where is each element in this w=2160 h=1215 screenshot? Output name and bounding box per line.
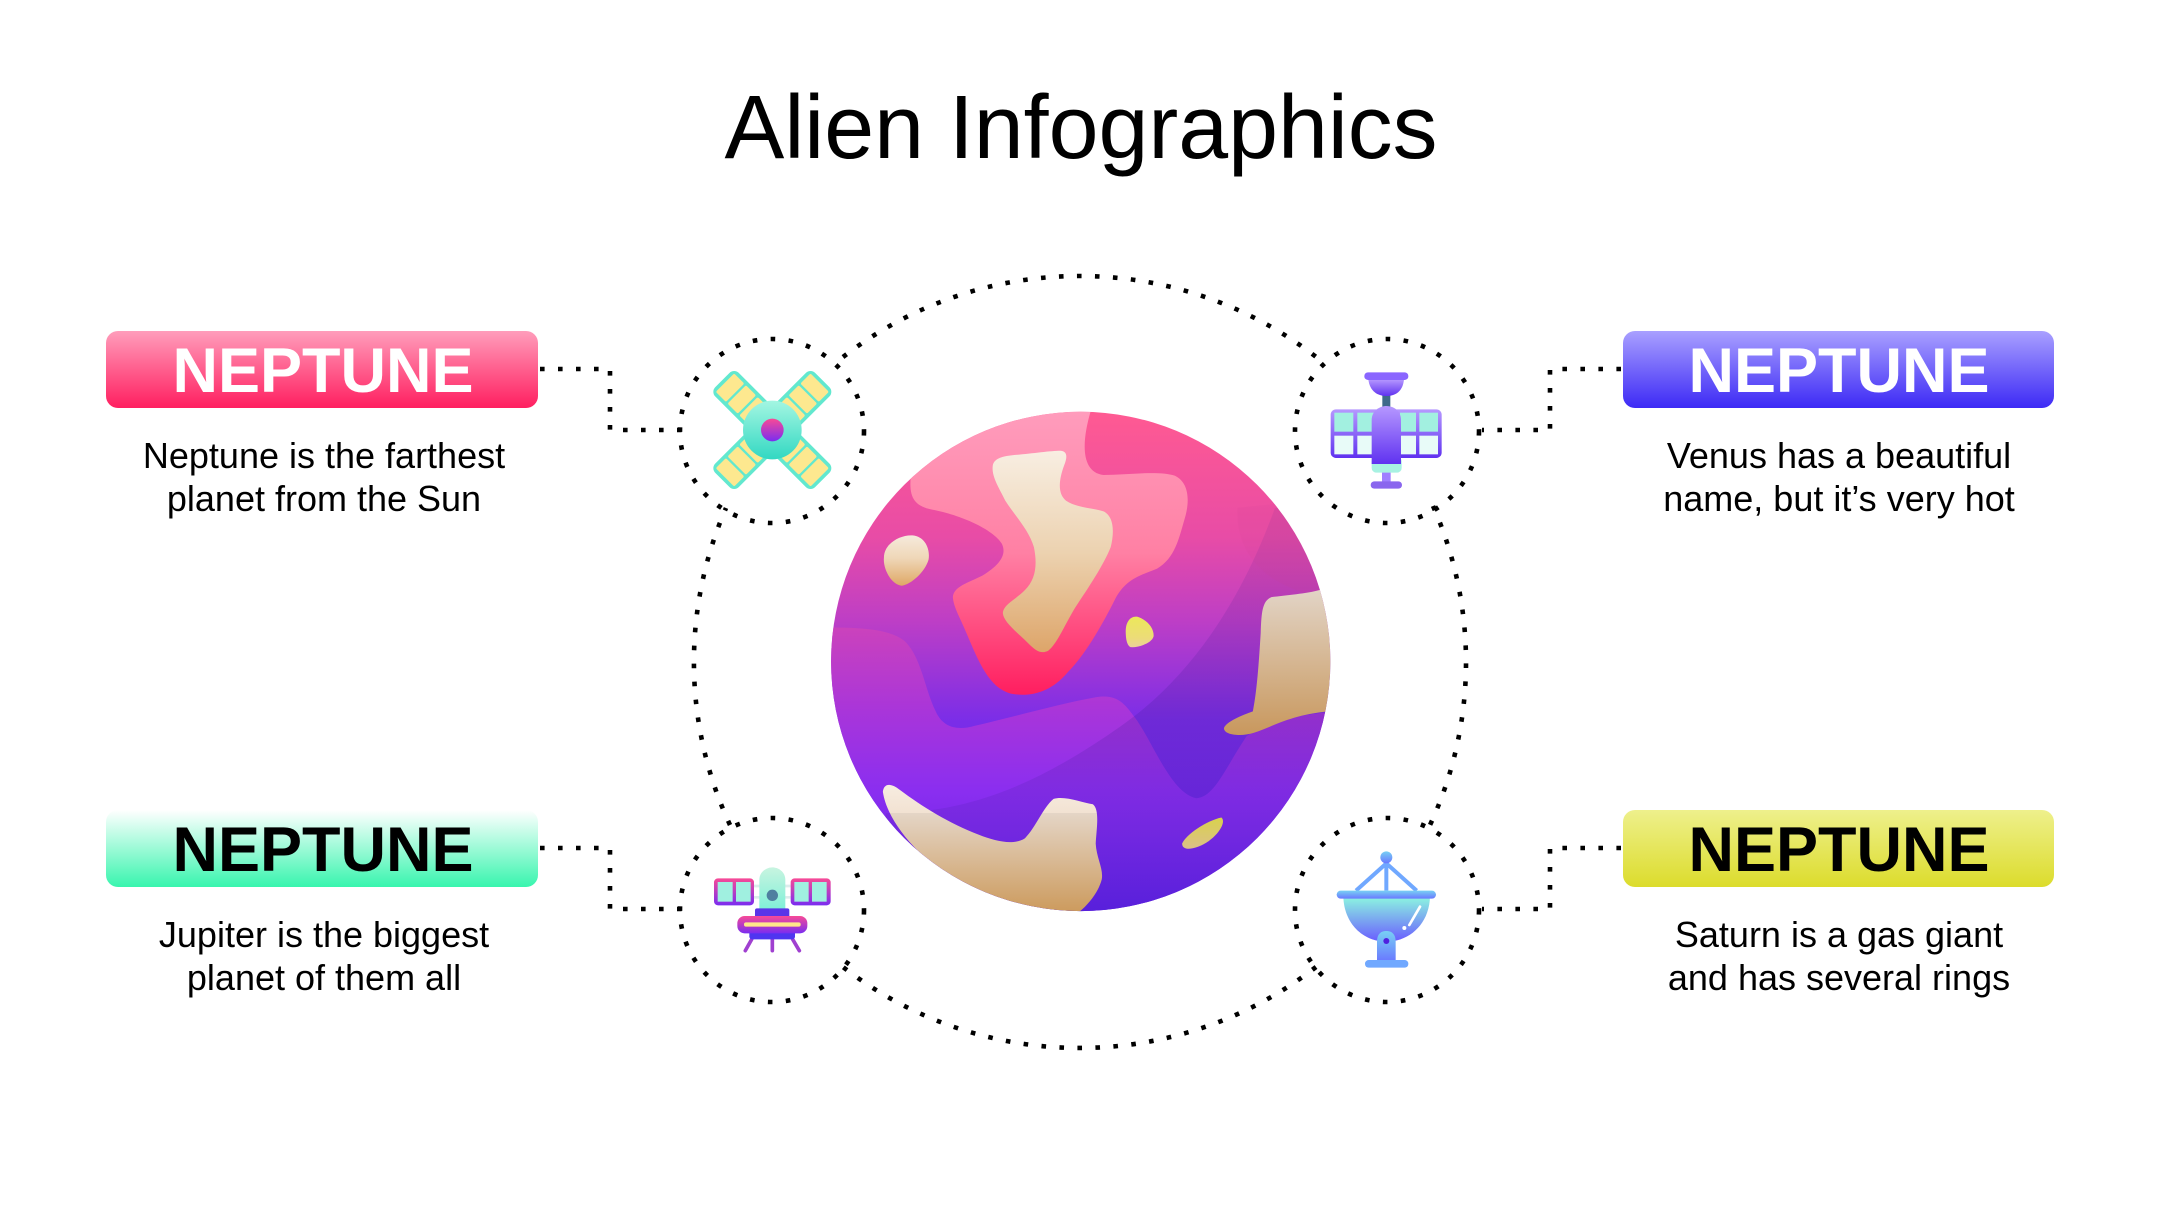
icon: purple satellite bbox=[1331, 372, 1442, 489]
panel: top-left label: planet from the Sun bbox=[167, 478, 481, 519]
panel: bottom-right label: Saturn is a gas giant bbox=[1675, 914, 2003, 955]
panel: bottom-right label: NEPTUNE bbox=[1688, 815, 1990, 885]
panel: top-left label: Neptune is the farthest bbox=[143, 435, 505, 476]
panel: bottom-left label: Jupiter is the biggest bbox=[159, 914, 489, 955]
panel: top-left label bbox=[106, 331, 538, 519]
panel: top-left label: NEPTUNE bbox=[172, 336, 474, 406]
title: Alien Infographics bbox=[725, 78, 1437, 178]
connector and orbit dotted lines bbox=[540, 276, 1621, 1048]
icon: lander satellite bbox=[714, 867, 831, 951]
panel: bottom-left label: planet of them all bbox=[187, 957, 461, 998]
panel: top-right label: Venus has a beautiful bbox=[1667, 435, 2011, 476]
panel: bottom-right label bbox=[1623, 810, 2054, 998]
panel: bottom-left label: NEPTUNE bbox=[172, 815, 474, 885]
panel: top-right label: name, but it’s very hot bbox=[1663, 478, 2015, 519]
icon: satellite dish bbox=[1337, 851, 1436, 968]
panel: top-right label: NEPTUNE bbox=[1688, 336, 1990, 406]
planet illustration bbox=[831, 412, 1330, 912]
panel: bottom-right label: and has several rings bbox=[1668, 957, 2010, 998]
panel: bottom-left label bbox=[106, 810, 538, 998]
panel: top-right label bbox=[1623, 331, 2054, 519]
icon: cross satellite bbox=[711, 368, 834, 492]
